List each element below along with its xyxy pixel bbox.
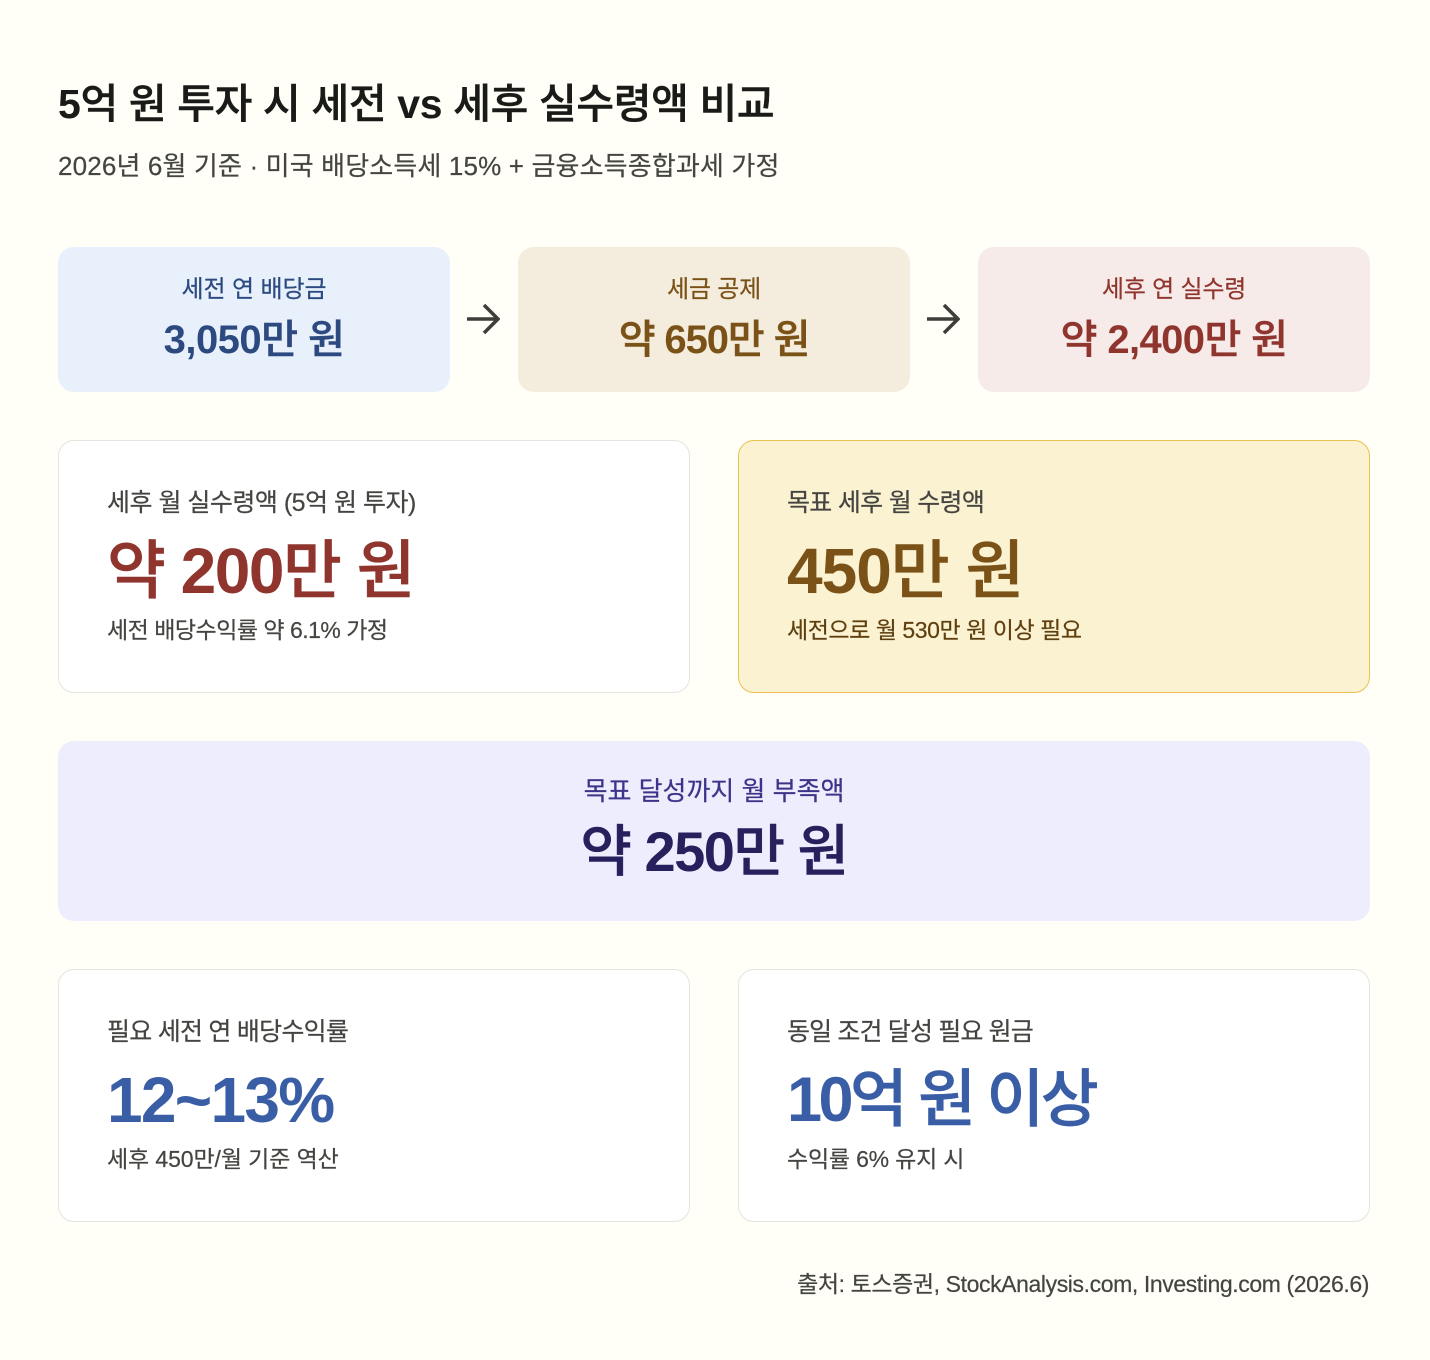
panel: pre-tax annual dividend — [58, 247, 450, 392]
label: 목표 세후 월 수령액 — [787, 489, 984, 517]
value: 3,050: 3,050만 원 — [164, 318, 344, 362]
label: tax deduction: 세금 공제 — [667, 276, 761, 303]
note: 세전으로 월 530만 원 이상 필요 — [787, 617, 1082, 643]
panel: required yield — [58, 969, 690, 1222]
panel: monthly shortfall — [58, 741, 1370, 921]
note: 세전 배당수익률 약 6.1% 가정 — [107, 617, 388, 643]
panel: after-tax annual — [978, 247, 1370, 392]
value: 12~13% — [107, 1064, 333, 1136]
note: 수익률 6% 유지 시 — [787, 1146, 964, 1172]
value: 약 200만 원 — [107, 535, 414, 607]
source: 출처: 토스증권, StockAnalysis.com, Investing.com (2026.6) — [797, 1271, 1369, 1297]
note: 세후 450만/월 기준 역산 — [107, 1146, 339, 1172]
value: 450만 원 — [787, 535, 1023, 607]
arrow 1 — [467, 304, 500, 334]
label: pre-tax annual dividend: 세전 연 배당금 — [181, 276, 327, 303]
panel: after-tax monthly — [58, 440, 690, 693]
label: 필요 세전 연 배당수익률 — [107, 1018, 348, 1046]
label: 동일 조건 달성 필요 원금 — [787, 1018, 1033, 1046]
panel: required principal — [738, 969, 1370, 1222]
label: 세후 월 실수령액 (5억 원 투자) — [107, 489, 416, 517]
subtitle: 2026년 6월 기준 · 미국 배당소득세 15% + 금융소득종합과세 가정 — [58, 151, 780, 181]
value: 2,400: 약 2,400만 원 — [1061, 318, 1287, 362]
value: 650: 약 650만 원 — [619, 318, 809, 362]
value: 10억 원 이상 — [787, 1065, 1095, 1135]
title: 5억 원 투자 시 세전 vs 세후 실수령액 비교 — [58, 81, 774, 127]
panel: target monthly — [738, 440, 1370, 693]
panel: tax deduction — [518, 247, 910, 392]
value: 약 250만 원 — [580, 820, 848, 883]
arrow 2 — [927, 304, 960, 334]
label: after-tax annual: 세후 연 실수령 — [1102, 276, 1246, 303]
label: 목표 달성까지 월 부족액 — [584, 776, 844, 806]
